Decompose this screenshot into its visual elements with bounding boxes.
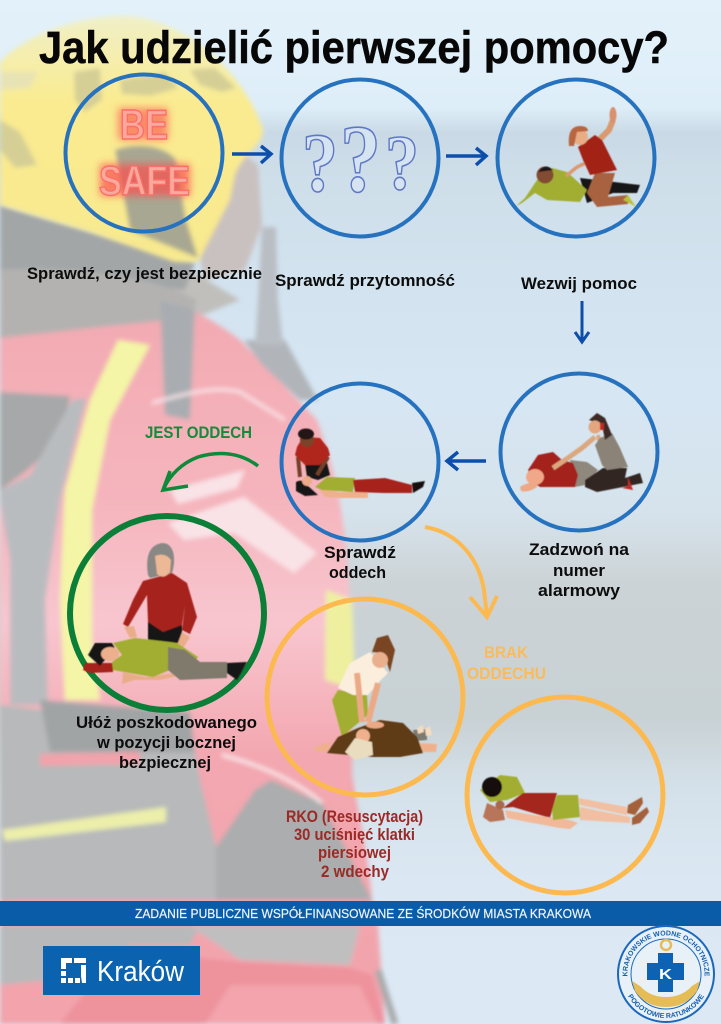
illustration: woman calling for help over man xyxy=(516,107,640,207)
arrow: to recovery position xyxy=(163,454,258,490)
logo: Kraków: Kraków xyxy=(97,956,185,988)
neon sign: be safe: BE xyxy=(120,101,168,148)
icon: question marks xyxy=(302,105,419,212)
arrow: step 4 to 5 xyxy=(447,452,486,470)
arrow: step 2 to 3 xyxy=(446,148,486,165)
banner: public funding xyxy=(0,901,721,926)
caption: CPR instructions: piersiowej xyxy=(318,844,391,862)
logo: Kraków xyxy=(43,946,200,995)
caption: step 5 xyxy=(324,544,396,582)
ring: step 4 xyxy=(500,374,658,530)
caption: step 5: Sprawdź xyxy=(324,544,396,562)
caption: step 4: Zadzwoń na xyxy=(529,541,630,559)
logo: water rescue badge: POGOTOWIE RATUNKOWE xyxy=(628,994,704,1018)
illustration: rescuer checks breathing of lying person xyxy=(295,428,425,498)
caption: CPR instructions xyxy=(286,808,423,881)
caption: recovery position: bezpiecznej xyxy=(119,753,211,772)
caption: step 1: Sprawdź, czy jest bezpiecznie xyxy=(27,265,262,283)
ring: step 1 xyxy=(66,74,222,232)
caption: CPR instructions: 30 uciśnięć klatki xyxy=(294,826,415,844)
ring: compressions xyxy=(267,599,463,795)
caption: recovery position: w pozycji bocznej xyxy=(96,733,236,752)
panel: step 4 phone emergency number xyxy=(500,374,658,530)
caption: step 4 xyxy=(529,541,630,600)
panel: step 5 check breathing xyxy=(282,384,438,540)
icon: anchor xyxy=(632,940,700,1007)
icon: question marks: ? xyxy=(340,105,381,212)
caption: step 2: Sprawdź przytomność xyxy=(275,272,455,290)
caption: recovery position: Ułóż poszkodowanego xyxy=(76,713,257,732)
title: Jak udzielić pierwszej pomocy? xyxy=(39,22,669,73)
caption: step 4: numer xyxy=(553,562,606,580)
caption: step 5: oddech xyxy=(329,564,386,582)
ring: step 3 xyxy=(498,80,654,236)
logo: water rescue badge xyxy=(617,925,715,1023)
panel: step 2 check consciousness xyxy=(282,80,438,236)
panel: CPR rescue breaths xyxy=(467,697,663,893)
icon: blue cross xyxy=(647,953,684,992)
illustration: chest compressions xyxy=(313,635,437,760)
logo: water rescue badge: K xyxy=(659,966,672,983)
caption: CPR instructions: 2 wdechy xyxy=(321,863,390,881)
caption: recovery position xyxy=(76,713,257,772)
icon: question marks: ? xyxy=(385,119,419,206)
illustration: rescue breaths xyxy=(480,775,649,829)
heading: no breathing: BRAK xyxy=(484,644,528,662)
neon sign: be safe: SAFE xyxy=(99,157,190,204)
illustration: recovery position xyxy=(83,543,247,684)
caption: step 4: alarmowy xyxy=(538,582,621,600)
ring: rescue breaths xyxy=(467,697,663,893)
ring: step 2 xyxy=(282,80,438,236)
arrow: step 3 to 4 xyxy=(575,301,589,342)
banner: public funding: ZADANIE PUBLICZNE WSPÓŁFINANSOWANE ZE ŚRODKÓW MIASTA KRAKOWA xyxy=(135,906,591,921)
caption: step 3: Wezwij pomoc xyxy=(521,275,637,293)
ring: step 5 xyxy=(282,384,438,540)
panel: step 3 call for help xyxy=(498,80,654,236)
heading: no breathing: ODDECHU xyxy=(467,665,546,683)
panel: CPR chest compressions xyxy=(267,599,463,795)
illustration: woman on phone beside lying person xyxy=(520,413,643,492)
neon sign: be safe xyxy=(99,101,190,204)
arrow: step 1 to 2 xyxy=(232,146,271,163)
arrow: to no breathing xyxy=(425,527,497,617)
icon: question marks: ? xyxy=(302,117,338,210)
heading: breathing present: JEST ODDECH xyxy=(145,424,252,442)
panel: step 1 be safe xyxy=(66,74,222,232)
panel: recovery position xyxy=(70,516,264,710)
logo: water rescue badge: KRAKOWSKIE WODNE OCHOTNICZE xyxy=(622,930,710,976)
ring: recovery position xyxy=(70,516,264,710)
icon: Kraków mark xyxy=(61,958,86,983)
caption: CPR instructions: RKO (Resuscytacja) xyxy=(286,808,423,826)
heading: no breathing xyxy=(467,644,546,683)
